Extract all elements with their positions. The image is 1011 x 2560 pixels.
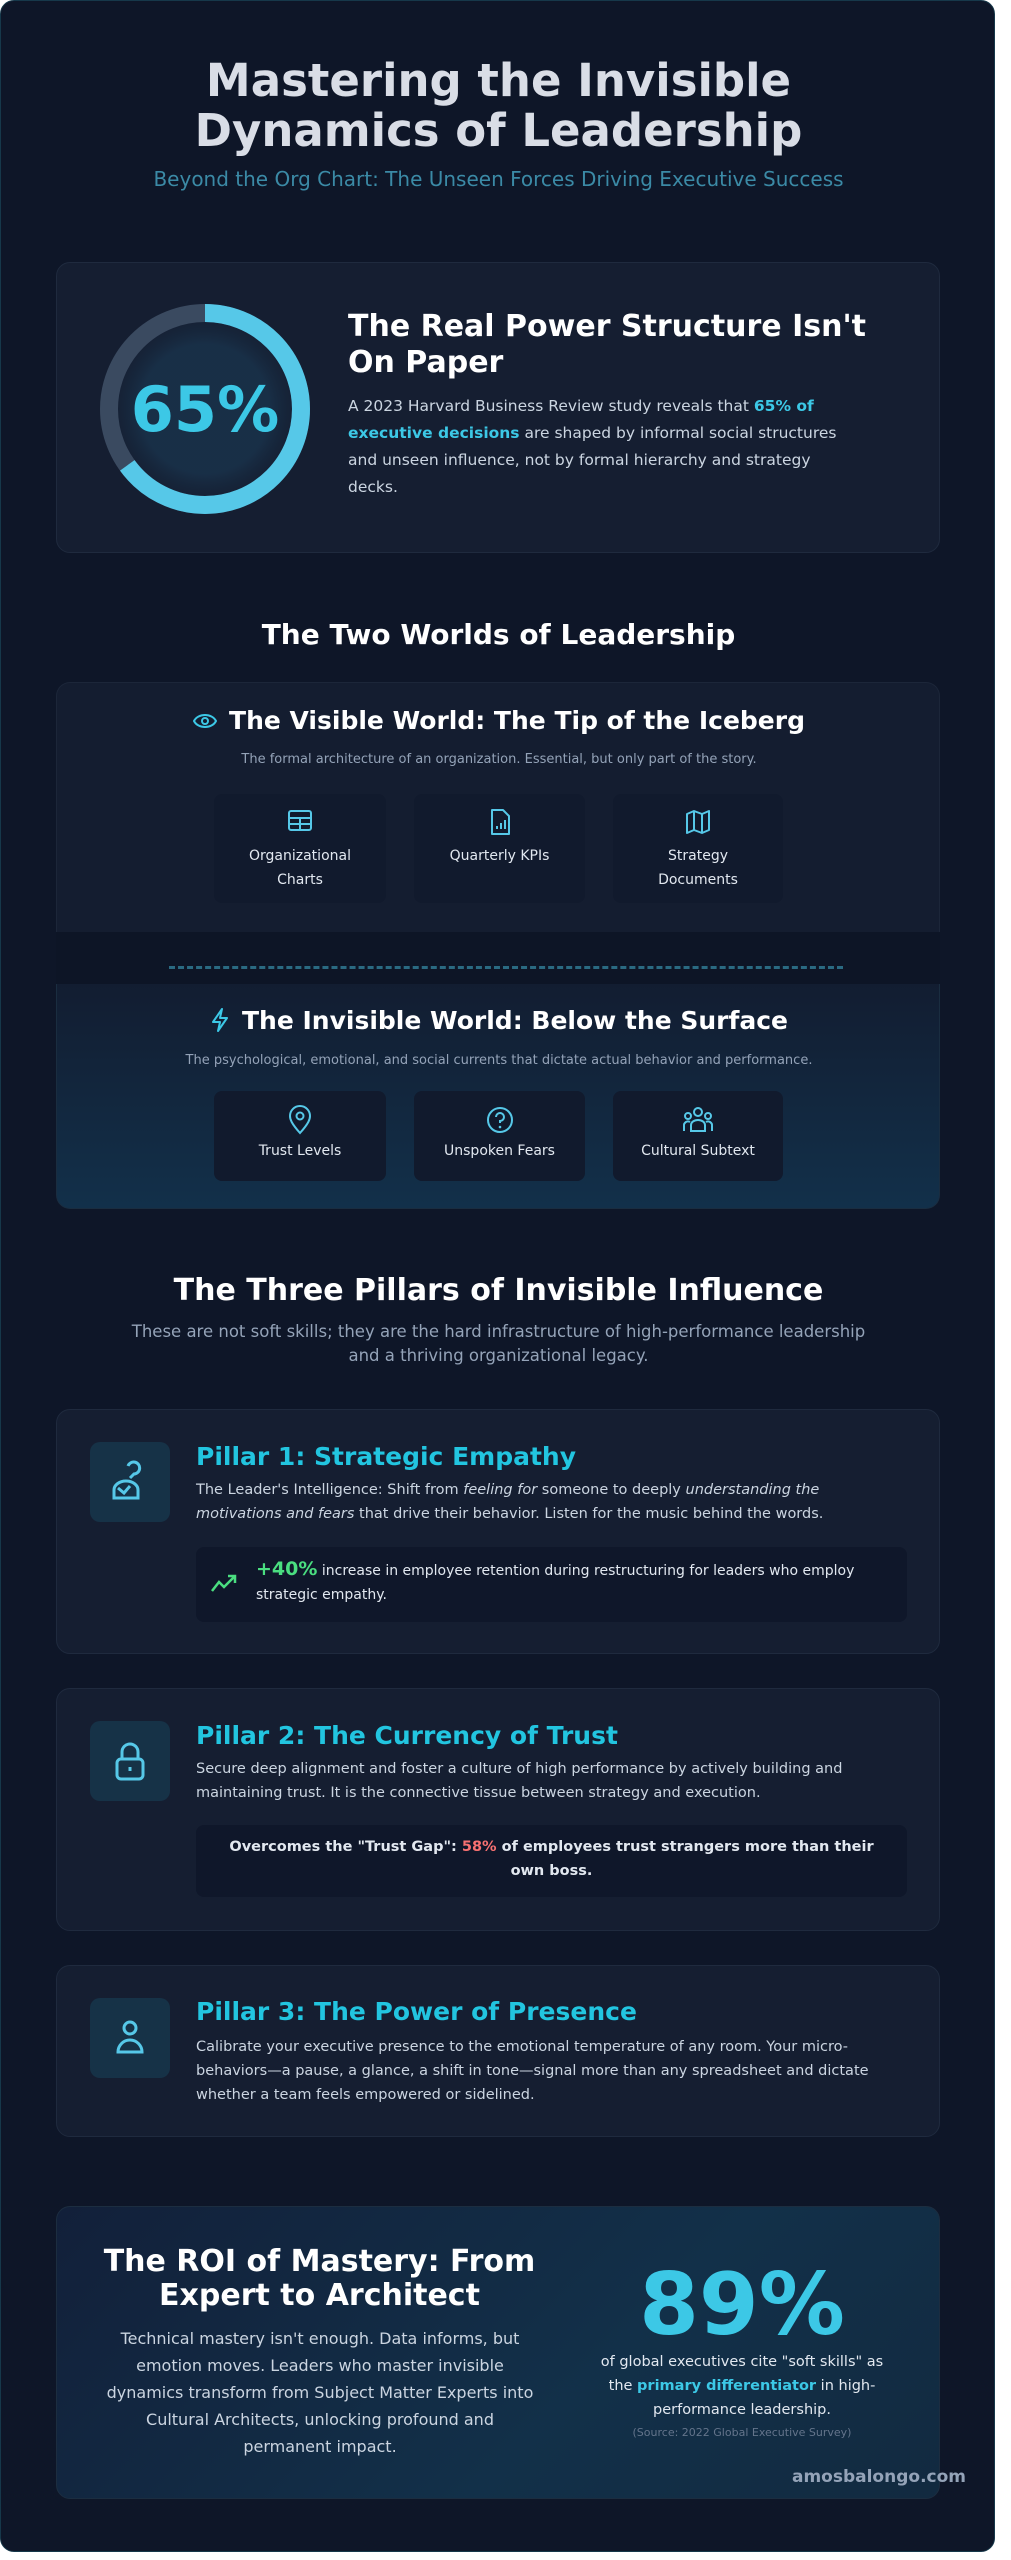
stat callout: [196, 1547, 907, 1622]
subtext: The formal architecture of an organization. Essential, but only part of the story.: [241, 752, 757, 767]
title: Pillar 2: The Currency of Trust: [196, 1721, 618, 1750]
title: Dynamics of Leadership: [195, 104, 802, 157]
title: Pillar 3: The Power of Presence: [196, 1997, 637, 2026]
title: [195, 54, 802, 157]
icon: person: [90, 1998, 170, 2078]
chart: 65% ring: [100, 304, 310, 514]
ROI paragraph: Technical mastery isn't enough. Data informs, but emotion moves. Leaders who master invisible dynamics transform from Subject Matter Experts into Cultural Architects, unlocking profound and permanent impact.: [107, 2329, 533, 2456]
heading with lightning icon: The Invisible World: Below the Surface: [242, 1006, 788, 1035]
heading: three pillars: The Three Pillars of Invisible Influence: [174, 1273, 823, 1308]
chart: 65% ring: 65%: [131, 373, 279, 446]
tile: unspoken fears: [414, 1091, 585, 1181]
tile: org charts: [214, 794, 386, 903]
description: Calibrate your executive presence to the emotional temperature of any room. Your micro-behaviors—a pause, a glance, a shift in tone—signal more than any spreadsheet and dictate whether a team feels empowered or sidelined.: [196, 2039, 869, 2103]
tile: cultural subtext: Cultural Subtext: [641, 1143, 755, 1159]
stat callout: Overcomes the "Trust Gap": 58% of employees trust strangers more than their own boss.: [229, 1839, 874, 1879]
tile: cultural subtext: [613, 1091, 783, 1181]
stat callout: +40% increase in employee retention during restructuring for leaders who employ strategic empathy.: [256, 1558, 854, 1603]
heading with eye icon: The Visible World: The Tip of the Iceberg: [229, 706, 805, 735]
tile: strategy docs: Documents: [658, 872, 738, 888]
divider band: [56, 932, 940, 984]
icon: empathy: [90, 1442, 170, 1522]
tile: KPIs: Quarterly KPIs: [450, 848, 549, 864]
panel: real power structure: [56, 262, 940, 553]
subtext: three pillars: These are not soft skills; they are the hard infrastructure of high-performance leadership and a thriving organizational legacy.: [132, 1322, 865, 1365]
subtitle: Beyond the Org Chart: The Unseen Forces Driving Executive Success: [153, 167, 844, 191]
heading: The Real Power Structure Isn't On Paper: [348, 309, 866, 380]
heading: two worlds: The Two Worlds of Leadership: [262, 618, 735, 651]
panel: ROI: [56, 2206, 940, 2499]
panel: pillar 1: [56, 1409, 940, 1654]
tile: strategy docs: Strategy: [668, 848, 728, 864]
footer: amosbalongo.com: [792, 2467, 966, 2487]
description: Secure deep alignment and foster a culture of high performance by actively building and maintaining trust. It is the connective tissue between strategy and execution.: [196, 1761, 842, 1801]
description: The Leader's Intelligence: Shift from feeling for someone to deeply understanding the motivations and fears that drive their behavior. Listen for the music behind the words.: [196, 1482, 823, 1522]
title: Mastering the Invisible: [206, 54, 791, 107]
title: Pillar 1: Strategic Empathy: [196, 1442, 576, 1471]
panel: invisible world: [56, 984, 940, 1209]
stat callout: [196, 1825, 907, 1897]
subtext: The psychological, emotional, and social currents that dictate actual behavior and performance.: [186, 1053, 812, 1068]
tile: trust levels: [214, 1091, 386, 1181]
big stat 89%: 89%: [639, 2255, 845, 2355]
tile: KPIs: [414, 794, 585, 903]
icon: lock: [90, 1721, 170, 1801]
stat text: of global executives cite "soft skills" as the primary differentiator in high-performance leadership.: [601, 2354, 883, 2418]
tile: trust levels: Trust Levels: [259, 1143, 341, 1159]
panel: pillar 3: [56, 1965, 940, 2137]
tile: unspoken fears: Unspoken Fears: [444, 1143, 555, 1159]
source: (Source: 2022 Global Executive Survey): [633, 2426, 851, 2439]
paragraph: A 2023 Harvard Business Review study reveals that 65% of executive decisions are shaped by informal social structures and unseen influence, not by formal hierarchy and strategy decks.: [348, 397, 836, 496]
panel: pillar 2: [56, 1688, 940, 1931]
tile: strategy docs: [613, 794, 783, 903]
panel: visible world: [56, 682, 940, 932]
ROI heading: The ROI of Mastery: From Expert to Architect: [104, 2244, 535, 2313]
tile: org charts: Organizational: [249, 848, 351, 864]
tile: org charts: Charts: [277, 872, 323, 888]
